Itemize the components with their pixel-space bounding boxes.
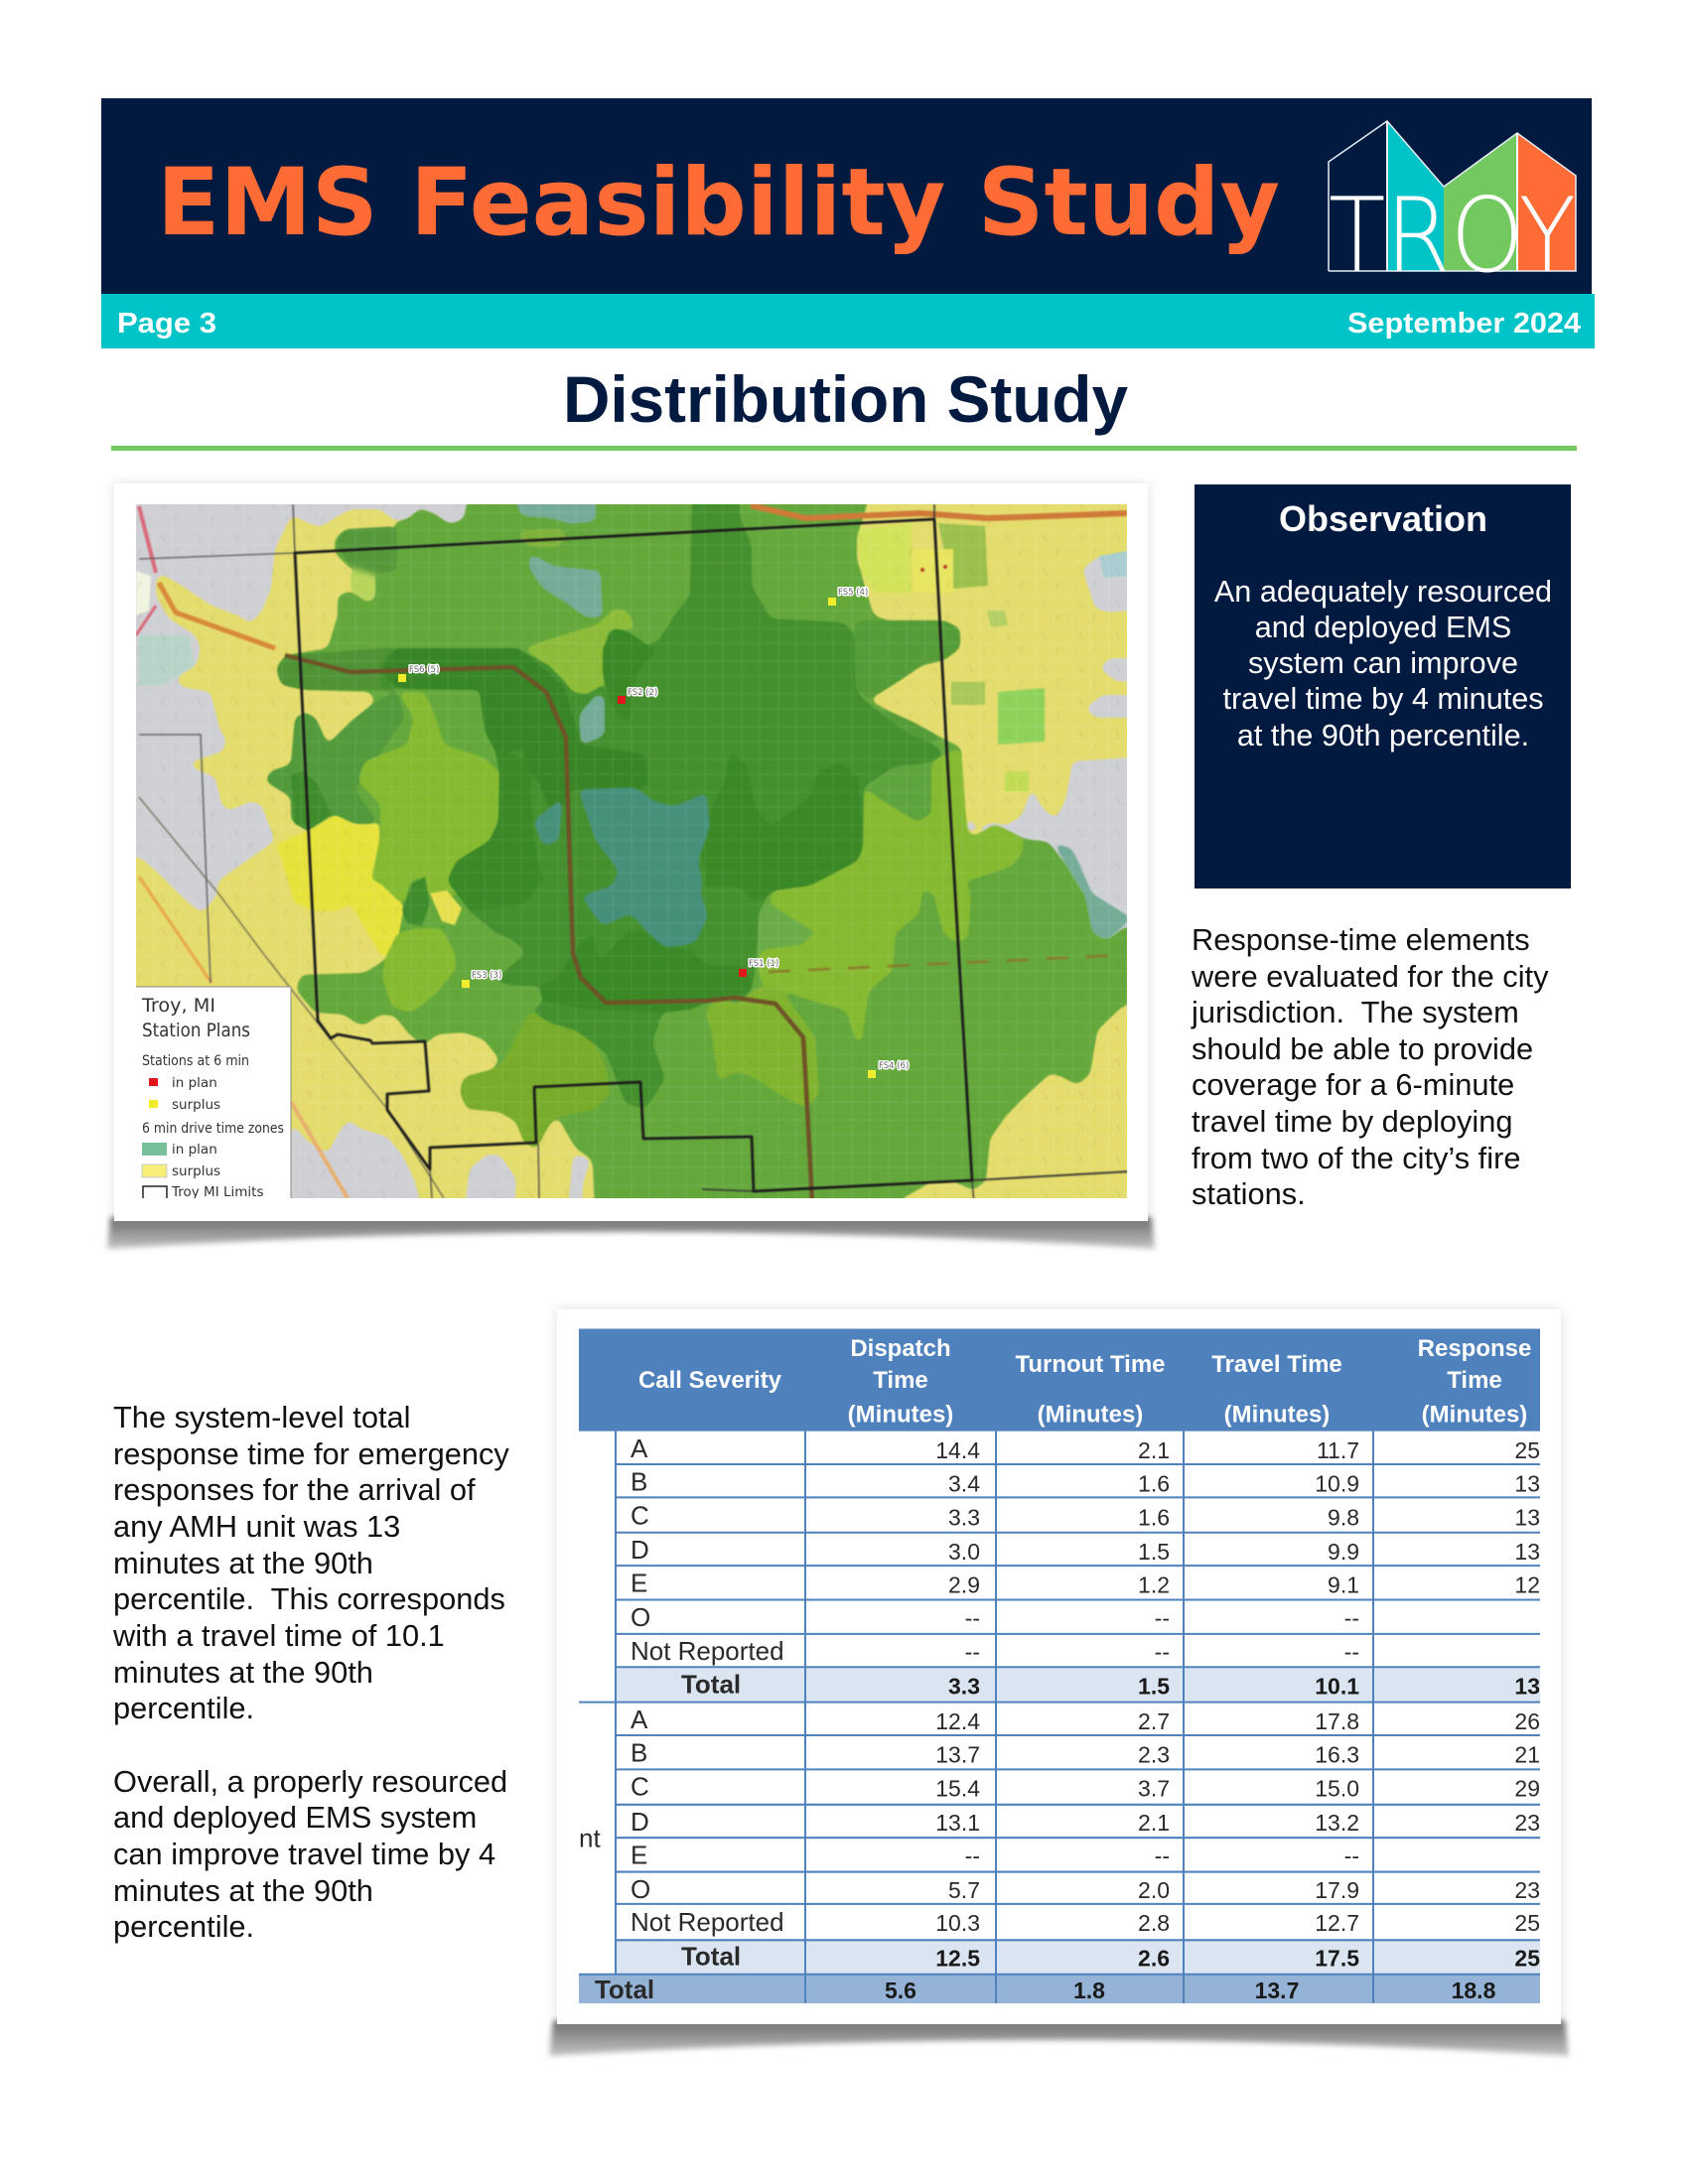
table group 1 rows: 2.9 [948,1571,980,1597]
table group 2 rows: 15.4 [935,1776,980,1802]
text block: response-time elements: should be able to provide [1192,1031,1533,1066]
text block: response-time elements: stations. [1192,1176,1306,1211]
table header: Time [1447,1367,1502,1394]
table group 2 rows: A [631,1705,648,1734]
table group 1 rows: 25 [1514,1437,1540,1463]
table group 1 rows: 1.2 [1138,1571,1170,1597]
table group 1 rows: A [631,1433,648,1463]
table group 1 rows [631,1433,1540,1700]
table header: (Minutes) [848,1401,953,1429]
table group 2 rows: B [631,1737,647,1767]
table group 2 rows: 10.3 [935,1910,980,1936]
table grand total row: 1.8 [1073,1978,1105,2003]
map station markers: FS3 (3) [472,971,501,981]
table group 2 rows: 17.9 [1315,1877,1359,1903]
table group 2 rows [579,1705,1540,1972]
table group 2 rows: 13.7 [935,1741,980,1767]
zone shading overlays [265,526,960,831]
table group 2 rows: 12.4 [935,1708,980,1734]
table group 2 rows: 17.5 [1315,1945,1359,1972]
text block: response-time elements: travel time by deploying [1192,1104,1513,1139]
table grand total row: 13.7 [1255,1978,1299,2003]
map legend: Station Plans [142,1020,250,1041]
table group 1 rows: 3.3 [948,1505,980,1531]
table group 1 rows: 3.3 [948,1673,980,1700]
table header: Time [873,1367,928,1394]
table group 2 rows: 23 [1514,1877,1540,1903]
table grand total row: 5.6 [885,1978,916,2003]
logo: Troy houses [1329,121,1576,296]
table group 2 rows: 13.1 [935,1810,980,1836]
text block: response-time elements: were evaluated for the city [1191,959,1549,994]
text block: overall conclusion: percentile. [113,1909,254,1944]
table group 2 rows: 2.3 [1138,1741,1170,1767]
table grid [579,1432,1540,2003]
text block: response-time elements: from two of the city’s fire [1192,1141,1520,1175]
table group 2 rows: 2.6 [1138,1945,1170,1972]
table group 1 rows: 1.5 [1138,1539,1170,1565]
table header: (Minutes) [1224,1401,1330,1429]
text block: overall conclusion: Overall, a properly resourced [113,1764,507,1799]
map legend: Stations at 6 min [142,1053,249,1069]
table group 1 rows: 13 [1514,1673,1540,1700]
map station markers: FS5 (4) [838,588,868,598]
observation text: travel time by 4 minutes [1222,682,1544,716]
table group 2 rows: 3.7 [1138,1776,1170,1802]
table group 1 rows: 3.0 [948,1539,980,1565]
text block: system-level response time: response time for emergency [113,1436,509,1471]
map legend [136,987,295,1210]
table group 1 rows: Total [681,1669,741,1700]
map legend: Troy, MI [141,995,215,1017]
section heading: Distribution Study [563,362,1128,436]
table group 1 rows: 1.6 [1138,1470,1170,1496]
table group 1 rows: 3.4 [948,1470,980,1496]
observation text [1214,575,1552,752]
page number: Page 3 [117,308,216,340]
map station markers: FS1 (1) [749,959,778,969]
table group 1 rows: C [631,1501,649,1531]
text block: overall conclusion: and deployed EMS system [113,1800,477,1835]
text block: system-level response time: any AMH unit was 13 [113,1509,400,1544]
table group 1 rows: O [631,1602,650,1632]
logo: Troy houses: TROY [1329,177,1576,296]
table group 1 rows: -- [1344,1605,1359,1631]
table group 2 rows: Total [681,1941,741,1972]
text block: system-level response time: minutes at the 90th [113,1655,373,1690]
green divider [111,446,1577,451]
table: response times by call severity [579,1328,1540,2004]
table group 2 rows: -- [965,1843,980,1868]
text block: response-time elements: Response-time elements [1192,922,1530,957]
date bar [101,294,1595,348]
table group 2 rows: Not Reported [631,1907,784,1937]
table group 2 rows: 16.3 [1315,1741,1359,1767]
panel: observation callout [1195,484,1571,888]
text block: response-time elements [1191,922,1549,1211]
observation text: at the 90th percentile. [1237,719,1529,752]
table group 1 rows: 11.7 [1317,1437,1359,1463]
text block: system-level response time: The system-level total [113,1400,411,1434]
table group 1 rows: B [631,1466,647,1496]
table group 2 rows: nt [579,1823,601,1852]
table group 1 rows: 10.1 [1315,1673,1359,1700]
text block: system-level response time: minutes at the 90th [113,1546,373,1580]
dark overlap zone [380,477,944,1109]
table group 1 rows: 9.1 [1328,1571,1359,1597]
text block: response-time elements: jurisdiction. The system [1191,995,1519,1029]
table group 1 rows: 1.5 [1138,1673,1170,1700]
table group 1 rows: 10.9 [1315,1470,1359,1496]
table group 1 rows: 14.4 [935,1437,980,1463]
table group 2 rows: 17.8 [1315,1708,1359,1734]
table group 2 rows: 15.0 [1315,1776,1359,1802]
table group 2 rows: 2.7 [1138,1708,1170,1734]
table group 2 rows: D [631,1807,649,1837]
text block: system-level response time: percentile. [113,1691,254,1725]
table grand total row: 18.8 [1452,1978,1496,2003]
text block: system-level response time [112,1400,509,1725]
table group 2 rows: 12.5 [935,1945,980,1972]
table group 2 rows: 12.7 [1315,1910,1359,1936]
table group 1 rows: 13 [1514,1539,1540,1565]
table group 1 rows: E [631,1568,647,1597]
text block: system-level response time: responses for the arrival of [113,1472,476,1507]
date: September 2024 [1347,308,1581,340]
map legend: in plan [172,1075,217,1091]
table header: Travel Time [1211,1351,1342,1378]
panel: map photo frame [99,467,1172,1249]
observation text: system can improve [1248,646,1518,680]
table group 1 rows: -- [1155,1639,1170,1665]
map legend: in plan [172,1142,217,1158]
map station markers: FS6 (5) [409,665,439,675]
table group 2 rows: -- [1344,1843,1359,1868]
table shaded rows [579,1667,1540,2003]
table group 1 rows: 9.8 [1328,1505,1359,1531]
table grand total row: Total [595,1975,654,2004]
map legend: Troy MI Limits [171,1184,263,1200]
observation text: and deployed EMS [1255,611,1511,644]
text block: system-level response time: percentile. This corresponds [113,1581,505,1616]
table group 1 rows: 1.6 [1138,1505,1170,1531]
table group 2 rows: 29 [1514,1776,1540,1802]
table group 1 rows: 9.9 [1328,1539,1359,1565]
table group 2 rows: 25 [1514,1945,1540,1972]
table group 1 rows: 13 [1514,1505,1540,1531]
table group 1 rows: 12 [1514,1571,1540,1597]
teal overlaps [533,787,710,948]
panel: response time table frame [549,1309,1569,2056]
table header: Dispatch [850,1335,951,1362]
map legend: 6 min drive time zones [142,1121,284,1137]
table header: (Minutes) [1038,1401,1143,1429]
map legend: surplus [172,1163,220,1179]
table group 2 rows: 2.0 [1138,1877,1170,1903]
table group 2 rows: 13.2 [1315,1810,1359,1836]
yellow-green surplus overlaps [357,528,1025,1150]
table group 2 rows: 5.7 [948,1877,980,1903]
table group 2 rows: -- [1155,1843,1170,1868]
table group 1 rows: 13 [1514,1470,1540,1496]
table header: Call Severity [638,1367,782,1394]
text block: system-level response time: with a travel time of 10.1 [112,1618,445,1653]
observation heading: Observation [1279,498,1487,539]
table group 2 rows: 26 [1514,1708,1540,1734]
table group 2 rows: 23 [1514,1810,1540,1836]
map legend: surplus [172,1097,220,1113]
table group 2 rows: 2.8 [1138,1910,1170,1936]
title: EMS Feasibility Study [157,149,1280,257]
table header: Response [1418,1335,1531,1362]
header banner [101,98,1592,294]
map: station coverage zones [136,504,1127,1198]
map station markers: FS2 (2) [628,688,657,698]
table header [579,1328,1540,1432]
table group 1 rows: 2.1 [1138,1437,1170,1463]
map station markers: FS4 (6) [879,1061,909,1071]
table header: Turnout Time [1015,1351,1166,1378]
table grand total row [595,1979,1495,1999]
text block: overall conclusion: can improve travel time by 4 [113,1837,495,1871]
table group 1 rows: -- [965,1605,980,1631]
table group 2 rows: 25 [1514,1910,1540,1936]
table group 2 rows: E [631,1840,647,1870]
text block: overall conclusion [113,1764,507,1944]
text block: response-time elements: coverage for a 6-minute [1192,1067,1514,1102]
observation text: An adequately resourced [1214,575,1552,609]
table group 1 rows: -- [965,1639,980,1665]
text block: overall conclusion: minutes at the 90th [113,1873,373,1908]
table group 2 rows: O [631,1874,650,1904]
darkest overlap zones [380,627,863,1013]
table group 2 rows: C [631,1772,649,1802]
table group 2 rows: 21 [1514,1741,1540,1767]
table group 2 rows: 2.1 [1138,1810,1170,1836]
table group 1 rows: Not Reported [631,1636,784,1666]
table header: (Minutes) [1422,1401,1527,1429]
table group 1 rows: -- [1155,1605,1170,1631]
table group 1 rows: -- [1344,1639,1359,1665]
map station markers [398,588,909,1078]
table group 1 rows: D [631,1535,649,1565]
